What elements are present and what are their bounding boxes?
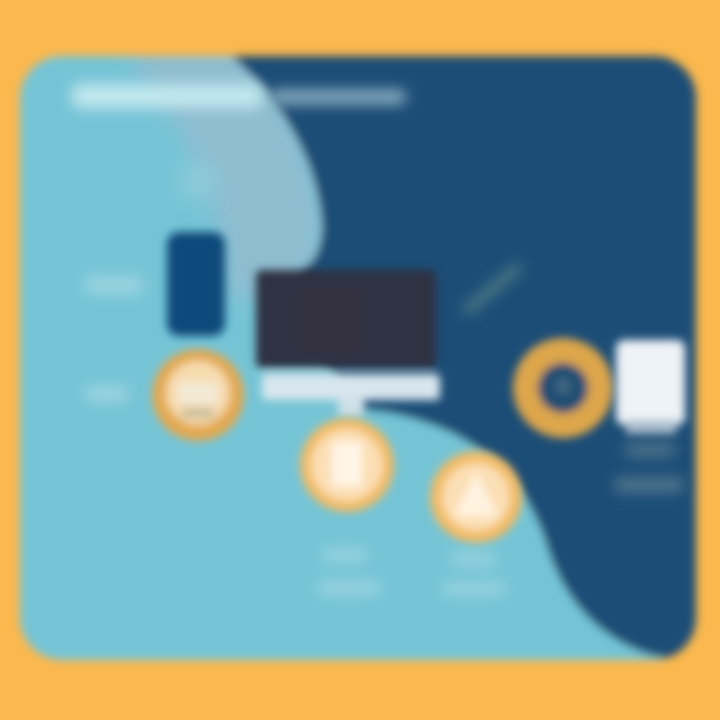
icon: monitor (256, 270, 440, 416)
text: illegible label left upper (85, 276, 143, 294)
icon: orange circle centre (300, 418, 394, 512)
icon: pencil stroke (465, 266, 520, 312)
title: illegible blurred heading (72, 84, 406, 108)
icon: target ring (513, 338, 613, 438)
icon: white phone (616, 340, 685, 434)
icon: orange circle left (152, 349, 244, 441)
pale arc area (135, 45, 322, 300)
text: illegible label centre (318, 548, 380, 596)
text: illegible label left lower (85, 386, 129, 402)
icon: navy phone (167, 232, 225, 336)
icon: orange circle right (430, 451, 522, 543)
text: faint label above phone (180, 165, 216, 197)
text: illegible label right (442, 552, 506, 596)
dark navy region (225, 50, 700, 665)
text: illegible label far right (615, 444, 683, 492)
